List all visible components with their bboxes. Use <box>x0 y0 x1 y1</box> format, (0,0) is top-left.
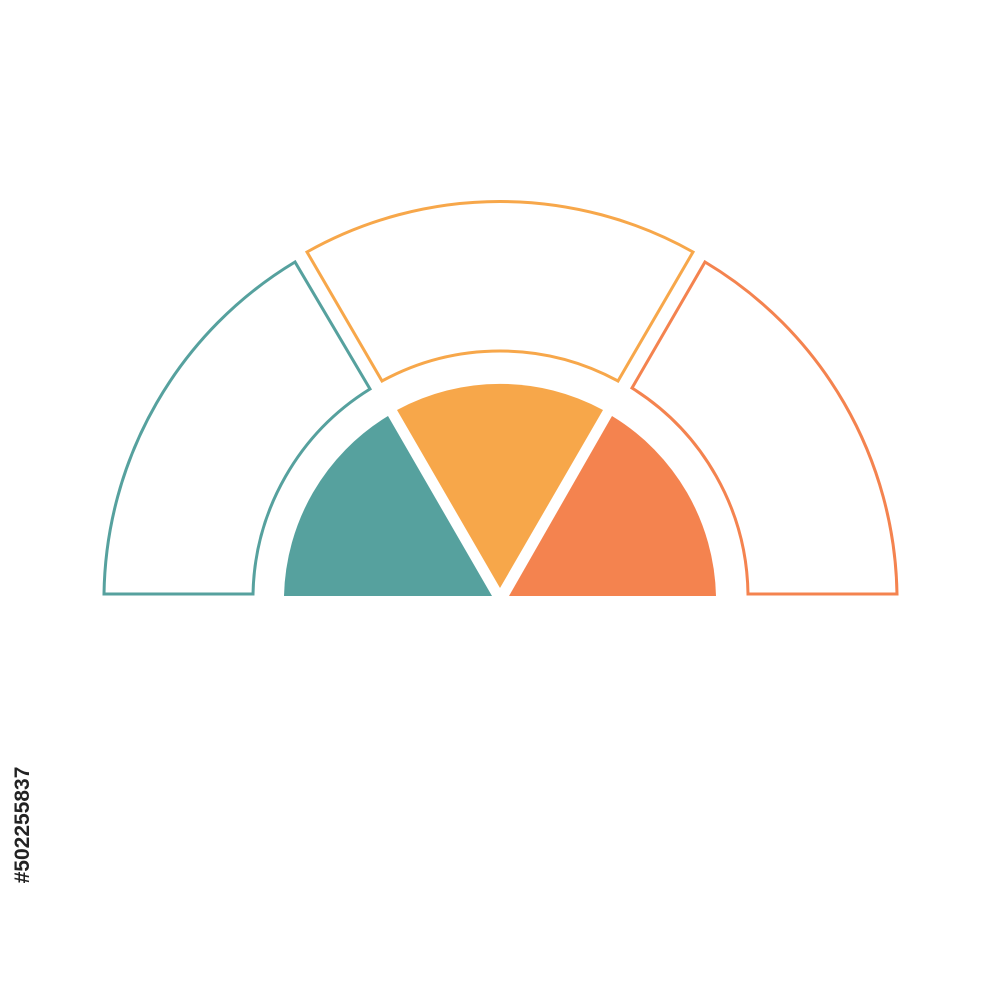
watermark id text: #502255837 <box>11 767 34 883</box>
filled wedge: orange <box>397 384 603 588</box>
filled wedge: teal <box>284 416 492 596</box>
outline segment: orange top <box>307 201 693 381</box>
outline segment: teal left <box>104 262 370 594</box>
filled wedge: coral <box>509 416 716 596</box>
outline segment: coral right <box>632 262 897 594</box>
